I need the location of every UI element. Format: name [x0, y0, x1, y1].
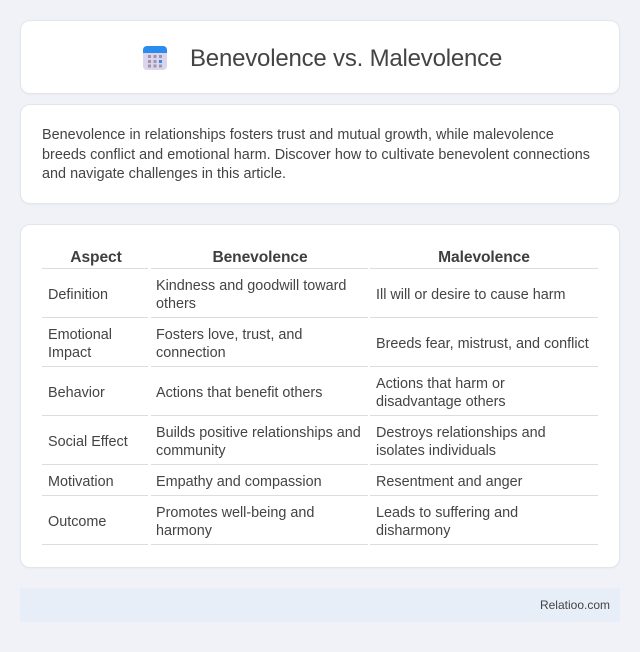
intro text [42, 127, 590, 182]
panel: comparison table [20, 224, 620, 568]
table header: Benevolence [212, 249, 308, 266]
row: social effect [48, 425, 546, 459]
row: motivation: Resentment and anger [376, 474, 522, 490]
table header: Malevolence [438, 249, 530, 266]
row: social effect: isolates individuals [376, 443, 496, 459]
row: emotional impact: Emotional [48, 327, 112, 343]
footer text: Relatioo.com [540, 598, 610, 612]
row: emotional impact: Breeds fear, mistrust, and conflict [376, 336, 589, 352]
row: motivation: Motivation [48, 474, 114, 490]
intro text: breeds conflict and emotional harm. Discover how to cultivate benevolent connections [42, 147, 590, 163]
row: definition [48, 278, 566, 312]
row: outcome: Leads to suffering and [376, 505, 518, 521]
intro text: Benevolence in relationships fosters trust and mutual growth, while malevolence [42, 127, 554, 143]
row: behavior: Behavior [48, 385, 105, 401]
panel: introduction [20, 104, 620, 204]
row: social effect: Destroys relationships and [376, 425, 546, 441]
table header [70, 249, 530, 266]
row: social effect: community [156, 443, 226, 459]
table header: Aspect [70, 249, 122, 266]
row: outcome: harmony [156, 523, 212, 539]
row: behavior: Actions that harm or [376, 376, 505, 392]
row: emotional impact: Impact [48, 345, 91, 361]
panel: title card [20, 20, 620, 94]
row: motivation [48, 474, 522, 490]
row: behavior: Actions that benefit others [156, 385, 322, 401]
row: outcome: disharmony [376, 523, 450, 539]
row: emotional impact: connection [156, 345, 226, 361]
row: behavior [48, 376, 506, 410]
icon: calendar [143, 46, 167, 70]
row: definition: Kindness and goodwill toward [156, 278, 346, 294]
intro text: and navigate challenges in this article. [42, 166, 286, 182]
row: definition: Definition [48, 287, 108, 303]
row: behavior: disadvantage others [376, 394, 506, 410]
row: social effect: Social Effect [48, 434, 128, 450]
row: definition: others [156, 296, 196, 312]
row: definition: Ill will or desire to cause harm [376, 287, 566, 303]
footer [20, 588, 620, 622]
row: outcome: Promotes well-being and [156, 505, 314, 521]
row: motivation: Empathy and compassion [156, 474, 322, 490]
row: emotional impact [48, 327, 589, 361]
row: emotional impact: Fosters love, trust, and [156, 327, 302, 343]
row: outcome: Outcome [48, 514, 106, 530]
title: Benevolence vs. Malevolence [190, 45, 502, 72]
row: social effect: Builds positive relationships and [156, 425, 361, 441]
row: outcome [48, 505, 518, 539]
